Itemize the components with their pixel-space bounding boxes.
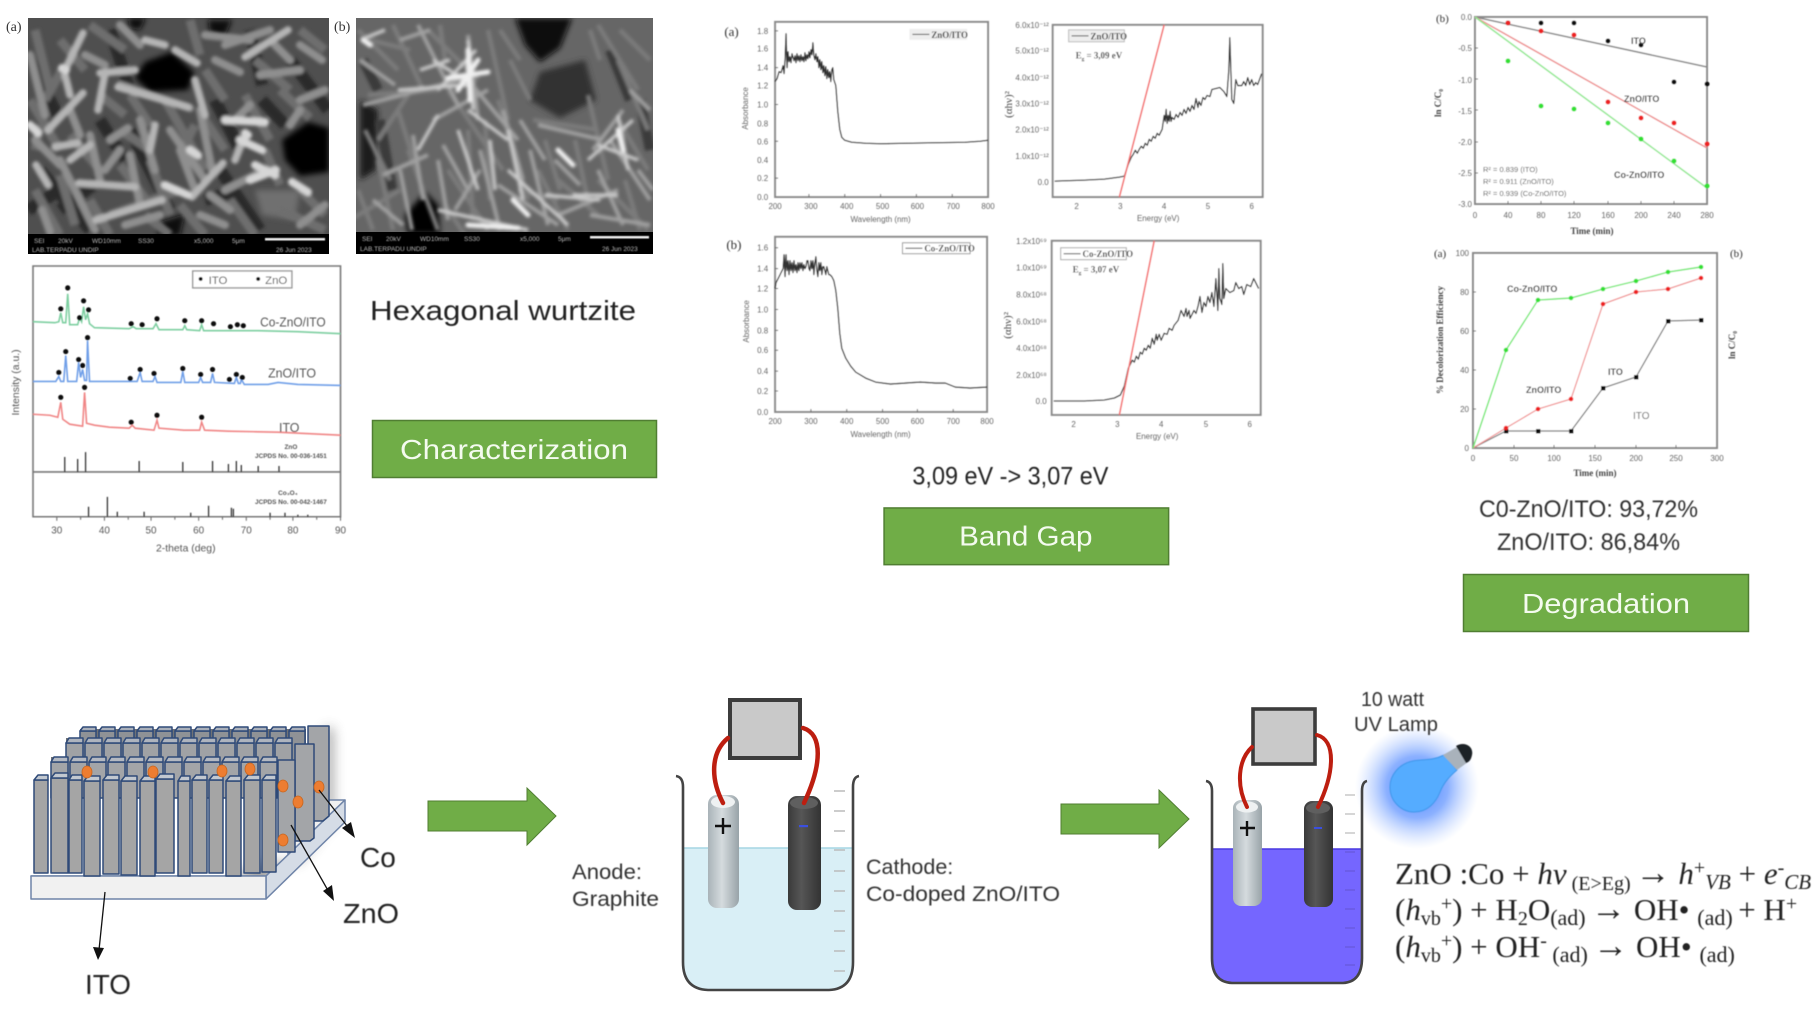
chart: Tauc plot ZnO/ITO: 3 [1118,202,1123,211]
XRD labels: 80 [287,526,299,537]
ZnO nanorods [34,726,329,876]
SEM image b: SS30 [464,236,480,243]
chart: absorbance ZnO/ITO [741,22,995,224]
chart: Tauc plot ZnO/ITO: 2 [1074,202,1079,211]
chart: ln C/C0 kinetics [1433,13,1714,236]
chart: decolorization efficiency: 300 [1710,454,1724,463]
chart: decolorization efficiency: ITO [1633,411,1650,422]
label: anode: Graphite [572,887,659,911]
chart: absorbance Co-ZnO/ITO: 700 [947,417,960,426]
chart: absorbance ZnO/ITO: 0.2 [757,174,769,183]
button: Band Gap [884,508,1169,565]
chart: Tauc plot ZnO/ITO: Energy (eV) [1137,214,1180,223]
arrow: step 1 to 2 [428,788,556,845]
Co dopant dots [82,763,324,846]
chart: Tauc plot Co-ZnO/ITO: E [1073,265,1079,275]
UV bulb [1390,744,1472,812]
chart: ln C/C0 kinetics: 200 [1634,211,1648,220]
chart: ln C/C0 kinetics: ITO [1631,36,1646,46]
XRD legend: ZnO [265,275,287,287]
chart: Tauc plot ZnO/ITO: E [1076,51,1082,61]
chart: ln C/C0 kinetics: ln C/C₀ [1433,89,1443,117]
scale marks [834,791,845,971]
chart: absorbance ZnO/ITO: 1.8 [757,27,769,36]
equation 1: + [1694,857,1705,879]
equation 1: VB [1705,870,1731,894]
label: UV lamp: 10 watt [1361,689,1424,711]
chart: decolorization efficiency: 20 [1460,405,1470,414]
chart: decolorization efficiency: % Decolorization Efficiency [1435,286,1445,394]
equation 3: - [1540,930,1547,952]
legend: Co-ZnO/ITO [924,244,975,254]
chart: absorbance Co-ZnO/ITO: 0.6 [757,346,769,355]
chart: Tauc plot ZnO/ITO: 2.0x10⁻¹² [1015,125,1049,134]
power supply box [730,700,800,758]
purple electrolyte [1213,849,1362,982]
chart: ln C/C0 kinetics: -1.0 [1458,76,1473,85]
electrolyte [684,848,853,989]
chart: absorbance Co-ZnO/ITO: 200 [768,417,782,426]
SEM image a: x5,000 [194,238,214,245]
chart: ln C/C0 kinetics: R² = 0.911 (ZnO/ITO) [1483,177,1554,186]
XRD labels: ZnO/ITO [268,366,316,380]
SEM image a: LAB.TERPADU UNDIP [32,247,99,254]
chart: Tauc plot ZnO/ITO: (αhν)² [1003,90,1015,118]
panel: degradation [1433,13,1748,632]
chart: ln C/C0 kinetics: -1.5 [1458,107,1473,116]
equation 2: OH• [1634,892,1690,927]
chart: ln C/C0 kinetics: 40 [1504,211,1513,220]
chart: Tauc plot Co-ZnO/ITO: 3 [1115,420,1120,429]
legend [1061,248,1133,260]
chart: ln C/C0 kinetics: 80 [1537,211,1546,220]
SEM image b: 26 Jun 2023 [602,246,638,253]
text: Hexagonal wurtzite: Hexagonal wurtzite [370,295,636,326]
chart: decolorization efficiency: Co-ZnO/ITO [1507,284,1557,294]
chart: absorbance ZnO/ITO: 1.6 [757,45,769,54]
equation 1: CB [1784,870,1811,894]
chart: absorbance ZnO/ITO: 200 [768,202,782,211]
chart: ln C/C0 kinetics: 0.0 [1461,13,1473,22]
equation 1: e [1764,856,1778,891]
chart: Tauc plot Co-ZnO/ITO: 4.0x10⁶⁸ [1016,344,1047,353]
chart: Tauc plot Co-ZnO/ITO: Energy (eV) [1136,432,1179,441]
chart: ln C/C0 kinetics: -2.0 [1458,138,1473,147]
chart: absorbance Co-ZnO/ITO: 1.0 [757,305,769,314]
chart: Tauc plot ZnO/ITO: g [1082,57,1085,63]
equation 3: → [1593,926,1628,965]
chart: absorbance ZnO/ITO: 0.0 [757,193,769,202]
XRD curve Co-ZnO/ITO [33,294,341,334]
chart: Tauc plot ZnO/ITO: 4.0x10⁻¹² [1015,74,1049,83]
equation 3: ) + OH [1452,929,1540,964]
label: (a): (a) [6,20,22,35]
chart: ln C/C0 kinetics: 280 [1700,211,1714,220]
equations [1395,853,1811,967]
equation 3: OH• [1636,929,1692,964]
XRD labels: ITO [279,421,300,435]
wires [1240,735,1331,807]
chart: decolorization efficiency [1434,248,1743,478]
chart: absorbance Co-ZnO/ITO: 0.0 [757,408,769,417]
chart: absorbance Co-ZnO/ITO: 400 [840,417,854,426]
chart: Tauc plot ZnO/ITO: 3.0x10⁻¹² [1015,99,1049,108]
anode electrode [1233,800,1262,906]
chart: ln C/C0 kinetics: 120 [1567,211,1581,220]
chart: Tauc plot ZnO/ITO: = 3,09 eV [1084,51,1123,61]
XRD labels: ZnO [284,444,297,451]
equation 1: (E>Eg) [1567,873,1636,895]
cathode electrode [1304,801,1333,907]
equation 2: vb [1421,908,1441,930]
chart: absorbance ZnO/ITO: 0.8 [757,119,769,128]
equation 2: (ad) [1697,905,1738,930]
chart: decolorization efficiency: 40 [1460,366,1470,375]
chart: Tauc plot Co-ZnO/ITO: g [1079,271,1082,277]
equation 2: + [1786,893,1797,915]
equation 1: h [1678,856,1694,891]
equation 1: - [1778,857,1784,879]
diagram: electrolysis cell with UV lamp [1206,689,1811,983]
label: (a): (a) [724,24,739,39]
chart: decolorization efficiency: 150 [1588,454,1602,463]
XRD legend [193,271,292,288]
chart: Tauc plot Co-ZnO/ITO: 5 [1204,420,1209,429]
text: degradation efficiencies: C0-ZnO/ITO: 93,72% [1479,496,1698,523]
chart: ln C/C0 kinetics: 0 [1473,211,1478,220]
SEM image a: 20kV [58,238,73,245]
XRD legend: ITO [209,275,227,287]
button: Characterization: Characterization [400,434,628,465]
chart: ln C/C0 kinetics: (b) [1436,13,1449,25]
beaker outline [1206,781,1367,983]
chart: Tauc plot Co-ZnO/ITO: (αhν)² [1002,311,1014,339]
ITO substrate [31,800,345,899]
diagram: Co-doped ZnO nanorods on ITO [31,726,399,1000]
anode electrode [708,795,739,908]
chart: Tauc plot Co-ZnO/ITO: 2.0x10⁶⁸ [1016,371,1047,380]
text: band gap values: 3,09 eV -> 3,07 eV [912,463,1109,491]
chart: Tauc plot Co-ZnO/ITO: 1.2x10⁶⁹ [1016,237,1047,246]
chart: Tauc plot Co-ZnO/ITO: 6 [1248,420,1253,429]
chart: absorbance ZnO/ITO: 300 [804,202,818,211]
chart: absorbance ZnO/ITO: 400 [840,202,854,211]
chart: Tauc plot ZnO/ITO: 6 [1249,202,1254,211]
chart: decolorization efficiency: 100 [1547,454,1561,463]
chart: ln C/C0 kinetics: 240 [1667,211,1681,220]
water surface [1213,848,1362,850]
chart: decolorization efficiency: ITO [1608,367,1623,377]
SEM image a: 26 Jun 2023 [276,247,312,254]
chart: absorbance ZnO/ITO: 700 [947,202,960,211]
XRD labels: JCPDS No. 00-036-1451 [255,453,327,460]
XRD labels: Co₃O₄ [278,490,298,497]
label: ITO: ITO [85,969,131,1000]
scale marks [1345,795,1355,833]
SEM image a: SS30 [138,238,154,245]
chart: decolorization efficiency: 60 [1460,327,1470,336]
chart: absorbance Co-ZnO/ITO: 600 [911,417,925,426]
XRD labels: JCPDS No. 00-042-1467 [255,499,327,506]
chart: decolorization efficiency: ZnO/ITO [1526,385,1561,395]
power supply box [1253,709,1315,764]
legend [902,243,975,254]
chart: absorbance Co-ZnO/ITO: 1.6 [757,244,769,253]
chart: absorbance Co-ZnO/ITO: Wavelength (nm) [850,430,911,439]
chart: Tauc plot Co-ZnO/ITO: 0.0 [1036,397,1047,406]
chart: absorbance Co-ZnO/ITO: 1.4 [757,265,769,274]
chart: Tauc plot ZnO/ITO: 6.0x10⁻¹² [1015,21,1049,30]
XRD labels: 30 [51,526,63,537]
legend [1069,30,1127,42]
arrow: ITO [93,892,105,960]
equation 2: + H [1738,892,1786,927]
chart: decolorization efficiency: 200 [1629,454,1643,463]
chart: absorbance ZnO/ITO: 600 [911,202,925,211]
XRD curve ZnO/ITO [33,341,341,385]
SEM image b: 5μm [558,236,571,243]
equation 2: 2 [1518,908,1528,930]
label: ZnO: ZnO [343,898,399,929]
chart: absorbance Co-ZnO/ITO: 500 [876,417,890,426]
SEM image a [28,18,329,254]
chart: absorbance ZnO/ITO: 1.0 [757,100,769,109]
chart: decolorization efficiency: 250 [1669,454,1683,463]
chart: absorbance ZnO/ITO: Wavelength (nm) [850,215,911,224]
label: cathode: Cathode: [866,855,953,879]
equation 2: + [1441,893,1452,915]
XRD labels: 2-theta (deg) [156,544,216,555]
chart: decolorization efficiency: 100 [1456,249,1470,258]
XRD labels [11,316,347,555]
SEM image a: 5μm [232,238,245,245]
chart: decolorization efficiency: 0 [1471,454,1476,463]
chart: absorbance Co-ZnO/ITO: 800 [980,417,994,426]
XRD labels: 90 [335,526,347,537]
panel: characterization [6,18,656,555]
chart: Tauc plot Co-ZnO/ITO: 2 [1071,420,1076,429]
chart: ln C/C0 kinetics: -2.5 [1458,169,1473,178]
SEM image a: SEI [34,238,45,245]
arrow: Co [319,790,355,838]
chart: ln C/C0 kinetics: R² = 0.839 (ITO) [1483,165,1538,174]
chart: Tauc plot Co-ZnO/ITO: 8.0x10⁶⁸ [1016,291,1047,300]
chart: decolorization efficiency: 0 [1465,444,1470,453]
XRD chart [11,266,347,555]
chart: ln C/C0 kinetics: ZnO/ITO [1624,94,1659,104]
equation 2: (ad) [1550,905,1591,930]
chart: Tauc plot Co-ZnO/ITO: 4 [1159,420,1164,429]
chart: absorbance Co-ZnO/ITO: 1.2 [757,285,769,294]
SEM image b [350,18,653,254]
chart: absorbance Co-ZnO/ITO: Absorbance [742,300,751,343]
chart: ln C/C0 kinetics: 160 [1601,211,1615,220]
SEM image b: LAB.TERPADU UNDIP [360,246,427,253]
wires [714,728,818,803]
equation 2: O [1528,892,1550,927]
XRD labels: 60 [193,526,205,537]
XRD labels: 40 [99,526,110,537]
equation 3: (h [1395,929,1421,964]
chart: ln C/C0 kinetics: Co-ZnO/ITO [1614,170,1664,180]
chart: absorbance Co-ZnO/ITO: 0.2 [757,387,769,396]
water surface [684,847,853,849]
shadow [229,728,333,882]
chart: Tauc plot ZnO/ITO: 0.0 [1038,178,1049,187]
chart: Tauc plot Co-ZnO/ITO: = 3,07 eV [1081,265,1120,275]
chart: absorbance Co-ZnO/ITO [742,237,994,439]
arrow: ZnO [291,825,334,901]
label: anode: Anode: [572,860,642,884]
XRD labels: Intensity (a.u.) [11,349,22,415]
chart: Tauc plot ZnO/ITO: 5 [1206,202,1211,211]
text: degradation efficiencies: ZnO/ITO: 86,84% [1497,529,1680,556]
SEM image b: x5,000 [520,236,540,243]
XRD reference sticks [65,452,308,517]
chart: absorbance Co-ZnO/ITO: 0.4 [757,367,769,376]
cathode electrode [788,796,821,910]
equation 1: + [1731,856,1764,891]
chart: Tauc plot ZnO/ITO [1003,21,1263,223]
label: (b): (b) [334,20,351,35]
equation 2: → [1591,889,1626,928]
chart: Tauc plot Co-ZnO/ITO: 1.0x10⁶⁹ [1016,264,1047,273]
equation 1: ZnO :Co + hv [1395,856,1567,891]
legend: ZnO/ITO [1091,31,1127,41]
chart: Tauc plot ZnO/ITO: 4 [1162,202,1167,211]
chart: decolorization efficiency: 50 [1510,454,1519,463]
button: Degradation: Degradation [1522,588,1690,619]
chart: decolorization efficiency: (a) [1434,248,1447,260]
chart: ln C/C0 kinetics: -3.0 [1458,200,1473,209]
label: UV lamp [1354,689,1438,736]
button: Characterization [372,420,656,478]
panel: band gap [724,21,1263,565]
chart: ln C/C0 kinetics: Time (min) [1570,226,1614,236]
label: anode [572,860,659,911]
button: Degradation [1464,574,1748,632]
chart: absorbance Co-ZnO/ITO: 300 [804,417,818,426]
chart: decolorization efficiency: (b) [1730,248,1743,260]
equation 1: → [1636,853,1671,892]
button: Band Gap: Band Gap [959,520,1093,551]
chart: Tauc plot ZnO/ITO: 1.0x10⁻¹² [1015,152,1049,161]
chart: absorbance ZnO/ITO: 1.2 [757,82,769,91]
equation 3: + [1441,930,1452,952]
equation 2: ) + H [1452,892,1518,927]
equation 3: vb [1421,945,1441,967]
chart: absorbance Co-ZnO/ITO: 0.8 [757,326,769,335]
SEM image a: WD10mm [92,238,121,245]
chart: absorbance ZnO/ITO: 1.4 [757,64,769,73]
XRD labels: 70 [241,526,252,537]
chart: Tauc plot ZnO/ITO: 5.0x10⁻¹² [1015,47,1049,56]
label: Co: Co [360,842,396,873]
chart: Tauc plot Co-ZnO/ITO: 6.0x10⁶⁸ [1016,317,1047,326]
legend: ZnO/ITO [931,30,968,40]
chart: absorbance ZnO/ITO: 500 [876,202,890,211]
equation 3: (ad) [1547,942,1593,967]
text: degradation efficiencies [1479,496,1698,556]
XRD labels: Co-ZnO/ITO [260,316,326,330]
SEM image b: 20kV [386,236,401,243]
UV glow [1355,725,1479,849]
chart: decolorization efficiency: 80 [1460,288,1470,297]
chart: absorbance ZnO/ITO: 0.6 [757,137,769,146]
label: cathode [866,855,1060,906]
chart: absorbance ZnO/ITO: 800 [981,202,995,211]
chart: decolorization efficiency: ln C/C₀ [1727,331,1737,359]
XRD labels: 50 [146,526,157,537]
SEM image b: SEI [362,236,373,243]
chart: Tauc plot Co-ZnO/ITO [1002,237,1261,441]
equation 2: (h [1395,892,1421,927]
label: cathode: Co-doped ZnO/ITO [866,882,1060,906]
XRD curve ITO [33,392,341,435]
chart: decolorization efficiency: Time (min) [1573,468,1617,478]
chart: absorbance ZnO/ITO: Absorbance [741,87,750,130]
arrow: step 2 to 3 [1061,790,1189,848]
label: (b): (b) [726,237,741,252]
beaker outline [676,776,859,990]
diagram: electrolysis cell without lamp [572,700,1060,990]
legend: Co-ZnO/ITO [1083,249,1133,259]
chart: ln C/C0 kinetics: -0.5 [1458,44,1473,53]
legend [909,29,968,40]
chart: absorbance ZnO/ITO: 0.4 [757,156,769,165]
SEM image b: WD10mm [420,236,449,243]
label: UV lamp: UV Lamp [1354,714,1438,736]
chart: ln C/C0 kinetics: R² = 0.939 (Co-ZnO/ITO) [1483,189,1567,198]
equation 3: (ad) [1699,942,1735,967]
XRD peak markers [56,285,246,425]
